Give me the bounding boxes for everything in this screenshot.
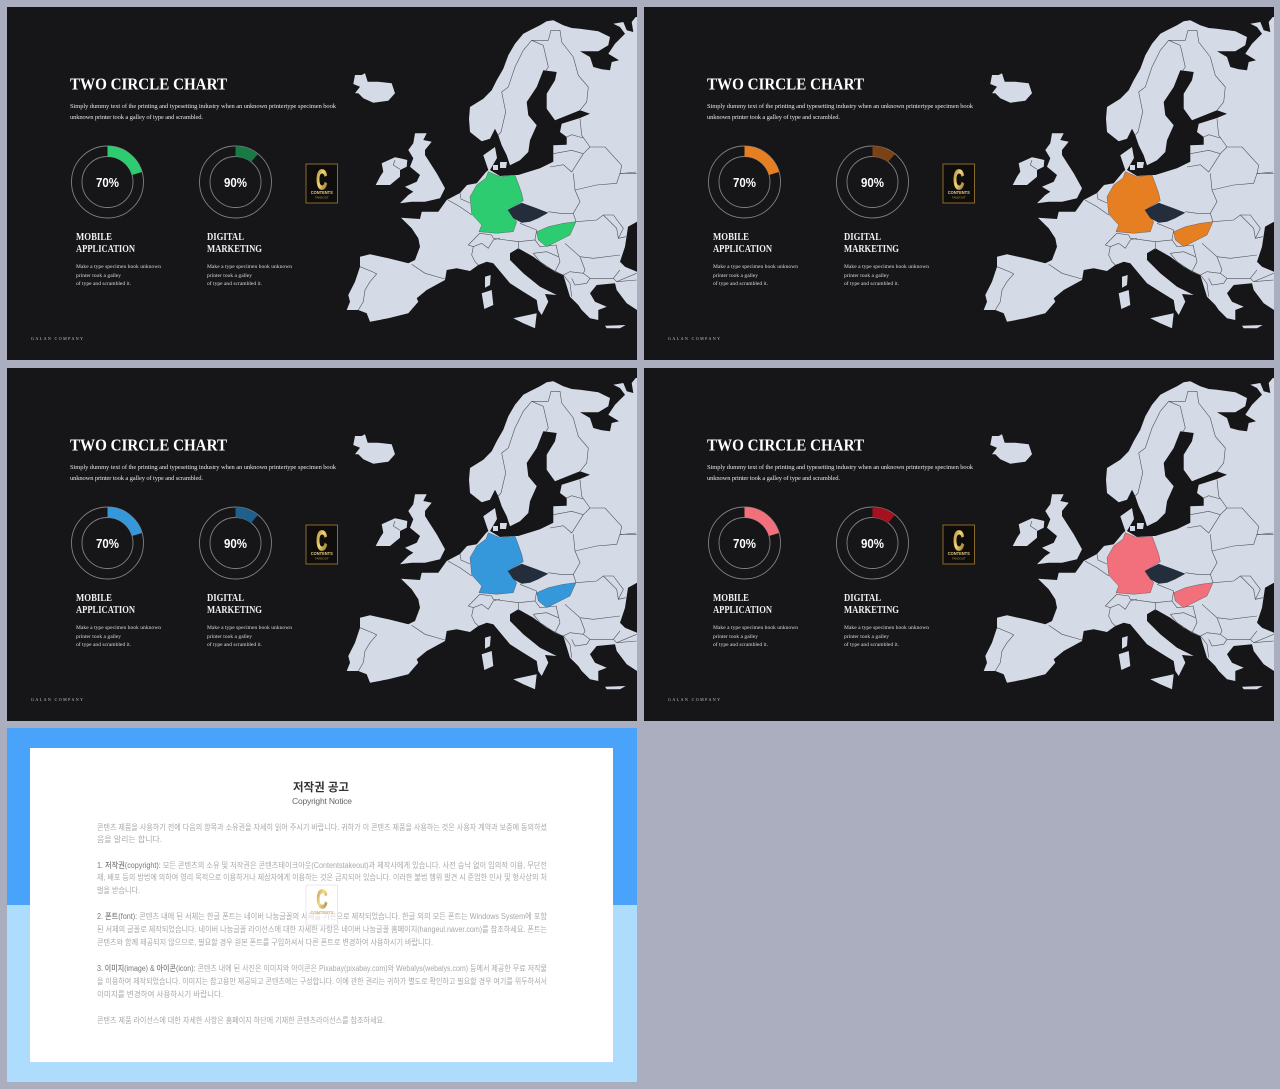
text: digital description: Make a type specimen book unknown [207,264,292,270]
icon: gold logo: C [953,164,964,195]
text: section 3 image and icon: 이미지를 변경하여 사용하시기 바랍니다. [97,989,223,999]
chart: 90% donut: 90% [861,537,884,551]
heading: digital marketing: MARKETING [207,605,262,616]
footer label: GALAN COMPANY [31,336,83,341]
map: Europe blue [347,378,637,689]
icon: gold logo [306,525,338,564]
text: digital description: Make a type specimen book unknown [844,625,929,631]
panel: copyright notice [7,728,637,1082]
heading: digital marketing [207,593,262,616]
heading: digital marketing: MARKETING [207,244,262,255]
heading: mobile application: APPLICATION [76,244,136,255]
panel: blue slide [7,368,637,721]
panel: orange slide [644,7,1274,360]
text: digital description: of type and scrambled it. [844,280,900,287]
text: intro [97,822,548,844]
heading: mobile application: MOBILE [713,593,749,604]
text: mobile description: of type and scrambled it. [713,641,769,648]
heading: digital marketing: DIGITAL [207,232,244,243]
description [707,464,974,482]
title: TWO CIRCLE CHART [70,436,228,454]
map: Europe green [347,17,637,328]
text: section 2 font: 콘텐츠와 함께 제공되지 않으므로, 필요할 경우 원본 폰트를 구입하셔서 다른 폰트로 변경하여 사용하시기 바랍니다. [97,937,433,947]
footer label: GALAN COMPANY [668,697,720,702]
heading: mobile application: MOBILE [76,593,112,604]
text: section 3 image and icon: 을 이용하여 제작되었습니다. 이미지는 참고용만 제공되고 콘텐츠에는 구성합니다. 이에 관한 권리는 귀하가 별도로 확인하고 필요할 경우 여기를 위두하셔서 [97,976,547,986]
text: section 2 font: 2. 폰트(font): 콘텐츠 내에 된 서체는 한글 폰트는 네이버 나눔글꼴의 서체를 기본으로 제작되었습니다. 한글 외의 모든 폰트는 Windows System에 포함 [97,911,548,921]
heading: digital marketing: DIGITAL [207,593,244,604]
chart: 90% donut [836,507,908,579]
icon: gold logo: C [953,525,964,556]
description: unknown printer took a galley of type and scrambled. [707,475,840,482]
icon: watermark logo: CONTENTS [310,910,334,915]
chart: 70% donut: 70% [96,537,119,551]
text: section 1 copyright: 1. 저작권(copyright): 모든 콘텐츠의 소유 및 저작권은 콘텐츠테이크아웃(Contentstakeout)과 제작사에게 있습니다. 사전 승낙 없이 임의적 이용, 무단전 [97,860,547,870]
panel: green slide [7,7,637,360]
icon: gold logo: TAKEOUT [952,556,966,560]
heading: digital marketing: MARKETING [844,244,899,255]
icon: gold logo: TAKEOUT [952,196,966,200]
description [70,103,337,121]
chart: 70% donut [72,146,144,218]
text: digital description: printer took a galley [844,273,889,279]
chart: 70% donut [708,146,780,218]
icon: gold logo: TAKEOUT [315,196,329,200]
heading: digital marketing [844,232,899,255]
description [70,464,337,482]
text: mobile description: printer took a galley [713,273,758,279]
text: section 1 copyright: 벌을 받습니다. [97,885,140,895]
icon: gold logo: CONTENTS [311,551,333,556]
heading: digital marketing: MARKETING [844,605,899,616]
heading: copyright notice: 저작권 공고 [293,780,349,794]
text: intro: 콘텐츠 제품을 사용하기 전에 다음의 항목과 소유권을 자세히 읽어 주시기 바랍니다. 귀하가 이 콘텐츠 제품을 사용하는 것은 사용자 계약과 보증에 동의하셨 [97,822,548,832]
icon: gold logo [943,164,974,203]
text: digital description [207,264,292,287]
text: mobile description [76,625,161,648]
text: section 1 copyright [97,860,547,895]
heading: mobile application [713,232,773,255]
heading: digital marketing: DIGITAL [844,593,881,604]
text: digital description: printer took a galley [207,273,252,279]
text: mobile description: of type and scrambled it. [713,280,769,287]
panel: red slide [644,368,1274,721]
chart: 90% donut: 90% [224,537,247,551]
text: section 1 copyright: 재, 배포 등의 방법에 의하여 영리 목적으로 이용하거나 제삼자에게 이용하는 것은 금지되어 있습니다. 이러한 불법 행위 발견 시 준엄한 민사 및 형사상의 처 [97,872,547,882]
heading: mobile application: APPLICATION [713,605,773,616]
icon: gold logo: C [316,164,327,195]
text: digital description: of type and scrambled it. [207,280,263,287]
chart: 70% donut: 70% [733,176,756,190]
text: digital description: Make a type specimen book unknown [207,625,292,631]
highlighted countries [470,533,576,608]
title: TWO CIRCLE CHART [70,74,228,94]
text: mobile description: printer took a galley [76,634,121,640]
heading: copyright notice: Copyright Notice [292,796,352,806]
text: digital description: printer took a galley [207,634,252,640]
chart: 90% donut: 90% [861,176,884,190]
text: digital description [844,625,929,648]
text: section 2 font [97,911,548,947]
chart: 90% donut [200,146,272,218]
text: mobile description: printer took a galley [76,273,121,279]
icon: gold logo: TAKEOUT [315,556,329,560]
text: digital description: of type and scrambled it. [844,641,900,648]
heading: mobile application [76,593,136,616]
text: mobile description: Make a type specimen book unknown [76,264,161,270]
text: mobile description: printer took a galley [713,634,758,640]
title: TWO CIRCLE CHART [707,436,865,454]
text: mobile description: Make a type specimen book unknown [713,625,798,631]
heading: mobile application: APPLICATION [713,244,773,255]
icon: watermark logo: C [316,884,328,914]
icon: gold logo [306,164,338,203]
heading: mobile application [76,232,136,255]
description: Simply dummy text of the printing and typesetting industry when an unknown printertype specimen book [707,464,974,471]
heading: copyright notice [292,780,352,806]
heading: mobile application: MOBILE [76,232,112,243]
text: digital description [207,625,292,648]
highlighted countries [1107,172,1213,247]
chart: 70% donut [708,507,780,579]
text: section 3 image and icon: 3. 이미지(image) & 아이콘(icon): 콘텐츠 내에 된 사진은 이미지와 아이콘은 Pixabay(pixabay.com)와 Webalys(webalys.com) 등에서 제공한 무료 저작물 [97,963,547,973]
icon: gold logo [943,525,974,564]
highlighted countries [470,172,576,247]
chart: 90% donut: 90% [224,176,247,190]
heading: digital marketing [207,232,262,255]
description: unknown printer took a galley of type and scrambled. [707,114,840,121]
text: digital description: Make a type specimen book unknown [844,264,929,270]
text: digital description: of type and scrambled it. [207,641,263,648]
icon: gold logo: CONTENTS [948,190,970,195]
chart: 90% donut [200,507,272,579]
icon: gold logo: CONTENTS [311,190,333,195]
title: TWO CIRCLE CHART [707,74,865,94]
description: Simply dummy text of the printing and typesetting industry when an unknown printertype specimen book [70,464,337,471]
text: mobile description: Make a type specimen book unknown [713,264,798,270]
description: Simply dummy text of the printing and typesetting industry when an unknown printertype specimen book [707,103,974,110]
text: mobile description: Make a type specimen book unknown [76,625,161,631]
chart: 90% donut [836,146,908,218]
description: unknown printer took a galley of type and scrambled. [70,475,203,482]
text: section 3 image and icon [97,963,547,999]
text: intro: 음을 알리는 합니다. [97,834,162,844]
map: Europe red [984,378,1274,689]
description: Simply dummy text of the printing and typesetting industry when an unknown printertype specimen book [70,103,337,110]
footer label: GALAN COMPANY [668,336,720,341]
chart: 70% donut: 70% [96,176,119,190]
heading: digital marketing [844,593,899,616]
text: section 2 font: 된 서체의 글꼴로 제작되었습니다. 네이버 나눔글꼴 라이선스에 대한 자세한 사항은 네이버 나눔글꼴 홈페이지(hangeul.naver.com)를 참조하세요. 폰트는 [97,924,547,934]
chart: 70% donut: 70% [733,537,756,551]
icon: watermark logo [306,884,338,925]
icon: gold logo: C [316,525,327,556]
map: Europe orange [984,17,1274,328]
chart: 70% donut [72,507,144,579]
text: closing note: 콘텐츠 제품 라이선스에 대한 자세한 사항은 홈페이지 하단에 기재한 콘텐츠라이선스를 참조하세요. [97,1015,385,1025]
heading: digital marketing: DIGITAL [844,232,881,243]
description [707,103,974,121]
text: mobile description [713,625,798,648]
text: mobile description [713,264,798,287]
heading: mobile application [713,593,773,616]
highlighted countries [1107,533,1213,608]
description: unknown printer took a galley of type and scrambled. [70,114,203,121]
text: digital description: printer took a galley [844,634,889,640]
icon: gold logo: CONTENTS [948,551,970,556]
text: mobile description: of type and scrambled it. [76,641,132,648]
footer label: GALAN COMPANY [31,697,83,702]
text: mobile description: of type and scrambled it. [76,280,132,287]
text: mobile description [76,264,161,287]
heading: mobile application: APPLICATION [76,605,136,616]
text: digital description [844,264,929,287]
heading: mobile application: MOBILE [713,232,749,243]
